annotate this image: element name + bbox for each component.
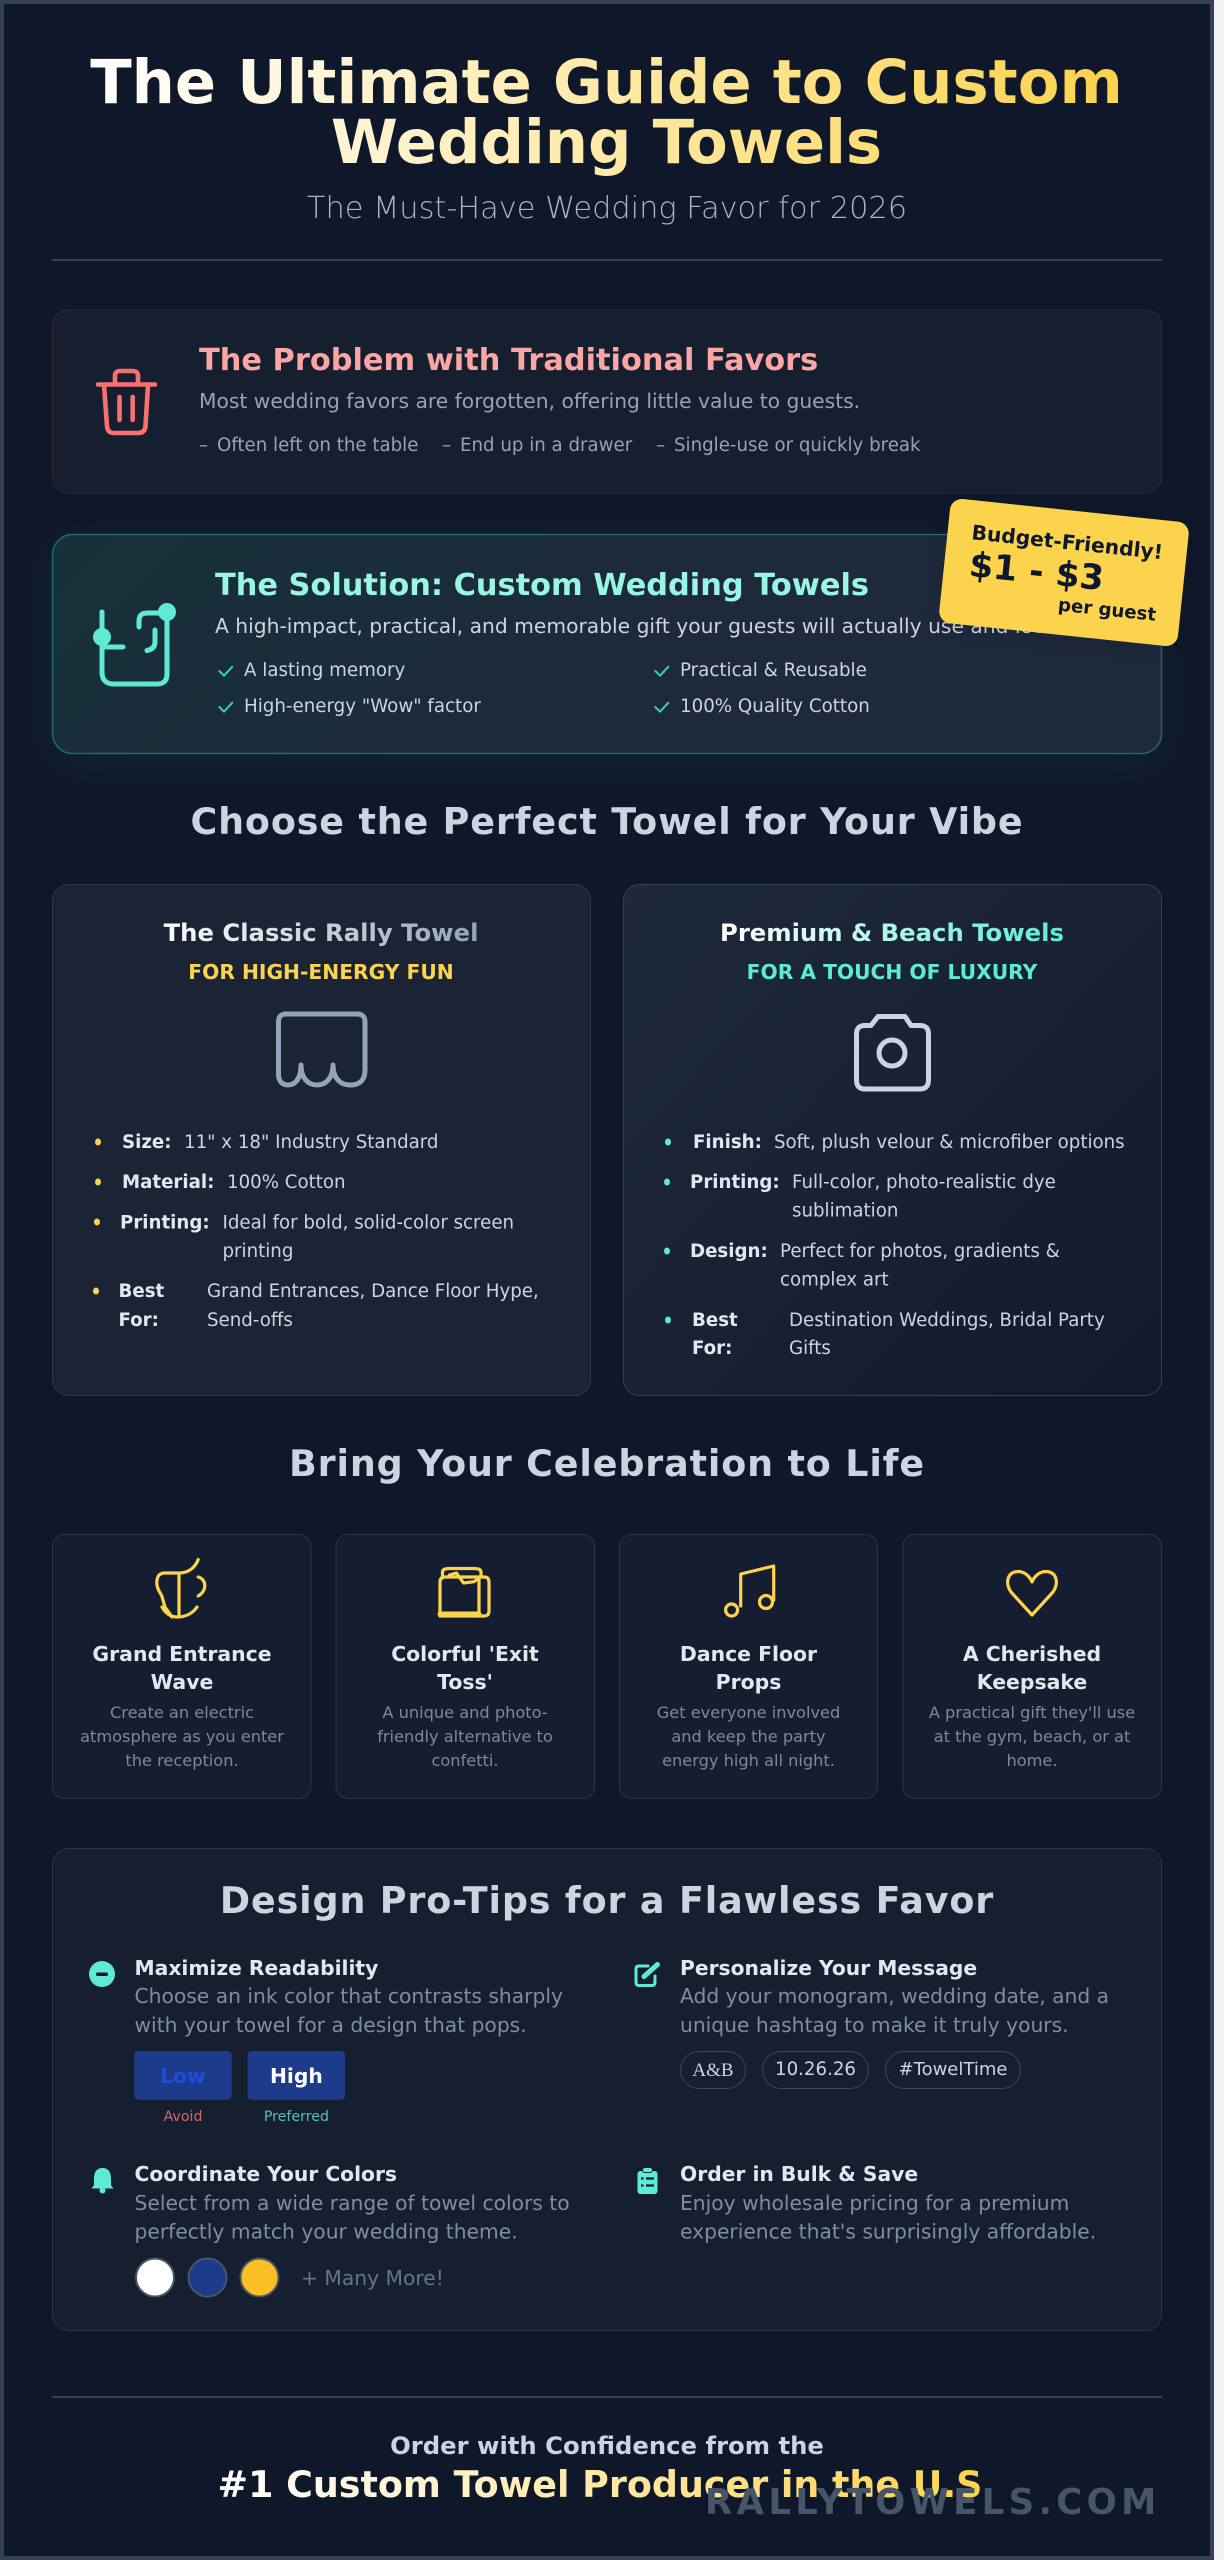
tip text: Enjoy wholesale pricing for a premium: [680, 2191, 1069, 2215]
card text: A practical gift they'll use: [929, 1703, 1135, 1722]
icon: clipboard: [638, 2168, 658, 2194]
card text: energy high all night.: [662, 1751, 835, 1770]
card text: [929, 1703, 1135, 1770]
spec list: Destination Weddings, Bridal Party: [789, 1310, 1105, 1331]
panel: grand entrance wave: [52, 1534, 311, 1798]
problem list: –: [442, 435, 451, 456]
icon: edit: [636, 1964, 658, 1986]
watermark: RALLYTOWELS.COM: [705, 2482, 1161, 2523]
problem list: End up in a drawer: [460, 435, 633, 456]
card title: Toss': [437, 1670, 493, 1694]
tip: personalize: [636, 1956, 1109, 2088]
checklist: Practical & Reusable: [680, 660, 867, 681]
card text: home.: [1006, 1751, 1058, 1770]
card title: Colorful 'Exit: [391, 1642, 539, 1666]
contrast low sample: [134, 2051, 232, 2125]
icon: confetti bag: [440, 1568, 489, 1616]
card subtitle: FOR A TOUCH OF LUXURY: [747, 960, 1038, 984]
contrast high sample: Preferred: [264, 2109, 329, 2125]
spec list: 11" x 18" Industry Standard: [184, 1132, 438, 1153]
spec list: Best: [692, 1310, 738, 1331]
icon: waving hand: [157, 1560, 205, 1617]
card text: and keep the party: [671, 1727, 826, 1746]
spec list: Finish:: [693, 1132, 762, 1153]
tip: coordinate colors: [92, 2162, 570, 2296]
card text: [80, 1703, 284, 1770]
tips heading: Design Pro-Tips for a Flawless Favor: [220, 1879, 994, 1922]
tip text: experience that's surprisingly affordable.: [680, 2220, 1096, 2244]
icon: bell: [92, 2168, 114, 2194]
contrast high sample: [248, 2051, 345, 2125]
spec list: For:: [692, 1338, 732, 1359]
problem list: Single-use or quickly break: [674, 435, 921, 456]
footer lead: Order with Confidence from the: [390, 2431, 824, 2460]
card subtitle: FOR HIGH-ENERGY FUN: [188, 960, 454, 984]
icon: towel: [278, 1014, 365, 1085]
problem list: Often left on the table: [217, 435, 418, 456]
card title: Grand Entrance: [92, 1642, 272, 1666]
spec list: [93, 1132, 539, 1331]
panel: premium beach towels: [624, 884, 1162, 1396]
spec list: For:: [118, 1310, 159, 1331]
tip text: [134, 2162, 570, 2244]
pill: monogram: A&B: [692, 2060, 734, 2081]
card title: Keepsake: [977, 1670, 1087, 1694]
tip text: Personalize Your Message: [680, 1956, 977, 1980]
panel: solution: [52, 534, 1162, 764]
more colors label: + Many More!: [301, 2266, 444, 2290]
spec list: Grand Entrances, Dance Floor Hype,: [207, 1281, 539, 1302]
card text: the reception.: [125, 1751, 239, 1770]
title: The Ultimate Guide to Custom: [90, 48, 1123, 118]
spec list: Printing:: [690, 1172, 780, 1193]
pill: hashtag: #TowelTime: [899, 2059, 1007, 2080]
tip text: Maximize Readability: [134, 1956, 378, 1980]
card text: A unique and photo-: [382, 1703, 548, 1722]
problem list: [199, 435, 921, 456]
panel: cherished keepsake: [903, 1534, 1162, 1798]
footer claim: #1 Custom Towel Producer in the U.S: [218, 2463, 982, 2506]
card title: The Classic Rally Towel: [164, 918, 478, 947]
card text: [377, 1703, 553, 1770]
spec list: Design:: [690, 1241, 768, 1262]
subtitle: The Must-Have Wedding Favor for 2026: [307, 191, 907, 226]
spec list: Ideal for bold, solid-color screen: [222, 1212, 514, 1234]
heading: celebration: Bring Your Celebration to Life: [289, 1442, 925, 1485]
card title: A Cherished: [963, 1642, 1101, 1666]
card title: Wave: [151, 1670, 213, 1694]
card text: at the gym, beach, or at: [934, 1727, 1130, 1746]
card title: [680, 1642, 817, 1694]
card title: Props: [716, 1670, 781, 1694]
panel: exit toss: [336, 1534, 594, 1798]
pill: date: [762, 2052, 868, 2088]
icon: camera: [856, 1016, 928, 1089]
tip text: with your towel for a design that pops.: [134, 2013, 527, 2037]
tip text: Choose an ink color that contrasts sharply: [134, 1984, 563, 2008]
contrast high sample: High: [270, 2064, 323, 2088]
tip text: Coordinate Your Colors: [134, 2162, 397, 2186]
spec list: sublimation: [792, 1200, 898, 1222]
spec list: Gifts: [789, 1338, 831, 1359]
tip: readability: [89, 1956, 563, 2125]
tip text: unique hashtag to make it truly yours.: [680, 2013, 1069, 2037]
checklist: High-energy "Wow" factor: [244, 696, 481, 717]
problem list: –: [199, 435, 208, 456]
icon: minus circle: [89, 1961, 115, 1987]
pill: hashtag: [886, 2052, 1020, 2088]
panel: design pro tips: [52, 1848, 1162, 2330]
pill: monogram: [680, 2052, 746, 2088]
title: Wedding Towels: [331, 108, 882, 178]
card text: [657, 1703, 840, 1770]
card title: Dance Floor: [680, 1642, 817, 1666]
panel: classic rally towel: [52, 884, 590, 1396]
checklist: 100% Quality Cotton: [680, 696, 870, 717]
card title: [963, 1642, 1101, 1694]
card title: Premium & Beach Towels: [720, 918, 1064, 947]
spec list: Printing:: [120, 1212, 210, 1234]
tip text: Order in Bulk & Save: [680, 2162, 918, 2186]
tip text: perfectly match your wedding theme.: [134, 2220, 518, 2244]
checklist: [219, 660, 870, 717]
solution heading: The Solution: Custom Wedding Towels: [215, 568, 869, 603]
tip: bulk order: [638, 2162, 1096, 2244]
tip text: Select from a wide range of towel colors to: [134, 2191, 570, 2215]
spec list: Send-offs: [207, 1310, 293, 1331]
heading: choose towel: Choose the Perfect Towel for Your Vibe: [191, 800, 1023, 843]
contrast low sample: Low: [160, 2064, 206, 2088]
contrast low sample: Avoid: [164, 2109, 202, 2125]
spec list: printing: [222, 1241, 293, 1262]
tip text: [134, 1956, 563, 2037]
icon: music note: [726, 1566, 774, 1616]
color swatches: [136, 2258, 278, 2296]
solution text: A high-impact, practical, and memorable gift your guests will actually use and love.: [215, 614, 1064, 638]
badge: budget friendly: Budget-Friendly!: [970, 520, 1164, 564]
card text: Get everyone involved: [657, 1703, 840, 1722]
spec list: Size:: [122, 1132, 172, 1153]
badge: budget friendly: per guest: [1057, 595, 1157, 626]
spec list: [664, 1132, 1125, 1359]
title: [90, 48, 1123, 178]
problem text: Most wedding favors are forgotten, offering little value to guests.: [199, 389, 860, 413]
card text: Create an electric: [110, 1703, 254, 1722]
spec list: Best: [118, 1281, 165, 1302]
panel: problem: [52, 310, 1162, 493]
checklist: A lasting memory: [244, 660, 406, 681]
spec list: Full-color, photo-realistic dye: [792, 1172, 1056, 1193]
card text: atmosphere as you enter: [80, 1727, 284, 1746]
tip text: [680, 2162, 1096, 2244]
problem heading: The Problem with Traditional Favors: [199, 343, 818, 378]
icon: heart: [1008, 1572, 1056, 1615]
tip text: Add your monogram, wedding date, and a: [680, 1984, 1109, 2008]
card title: [92, 1642, 272, 1694]
spec list: Material:: [122, 1172, 214, 1193]
spec list: Soft, plush velour & microfiber options: [774, 1132, 1125, 1153]
panel: dance floor props: [620, 1534, 878, 1798]
tip text: [680, 1956, 1109, 2037]
pill: date: 10.26.26: [775, 2059, 856, 2080]
spec list: complex art: [780, 1270, 889, 1290]
badge: budget friendly: $1 - $3: [967, 545, 1106, 599]
card text: confetti.: [431, 1751, 499, 1770]
problem list: –: [656, 435, 665, 456]
badge: budget friendly: [938, 498, 1190, 651]
card title: [391, 1642, 539, 1694]
icon: towel wave: [93, 603, 176, 684]
spec list: 100% Cotton: [227, 1172, 346, 1193]
icon: trash: [98, 371, 155, 433]
card text: friendly alternative to: [377, 1727, 553, 1746]
header: [90, 48, 1123, 226]
footer: [218, 2431, 982, 2506]
spec list: Perfect for photos, gradients &: [780, 1241, 1060, 1262]
